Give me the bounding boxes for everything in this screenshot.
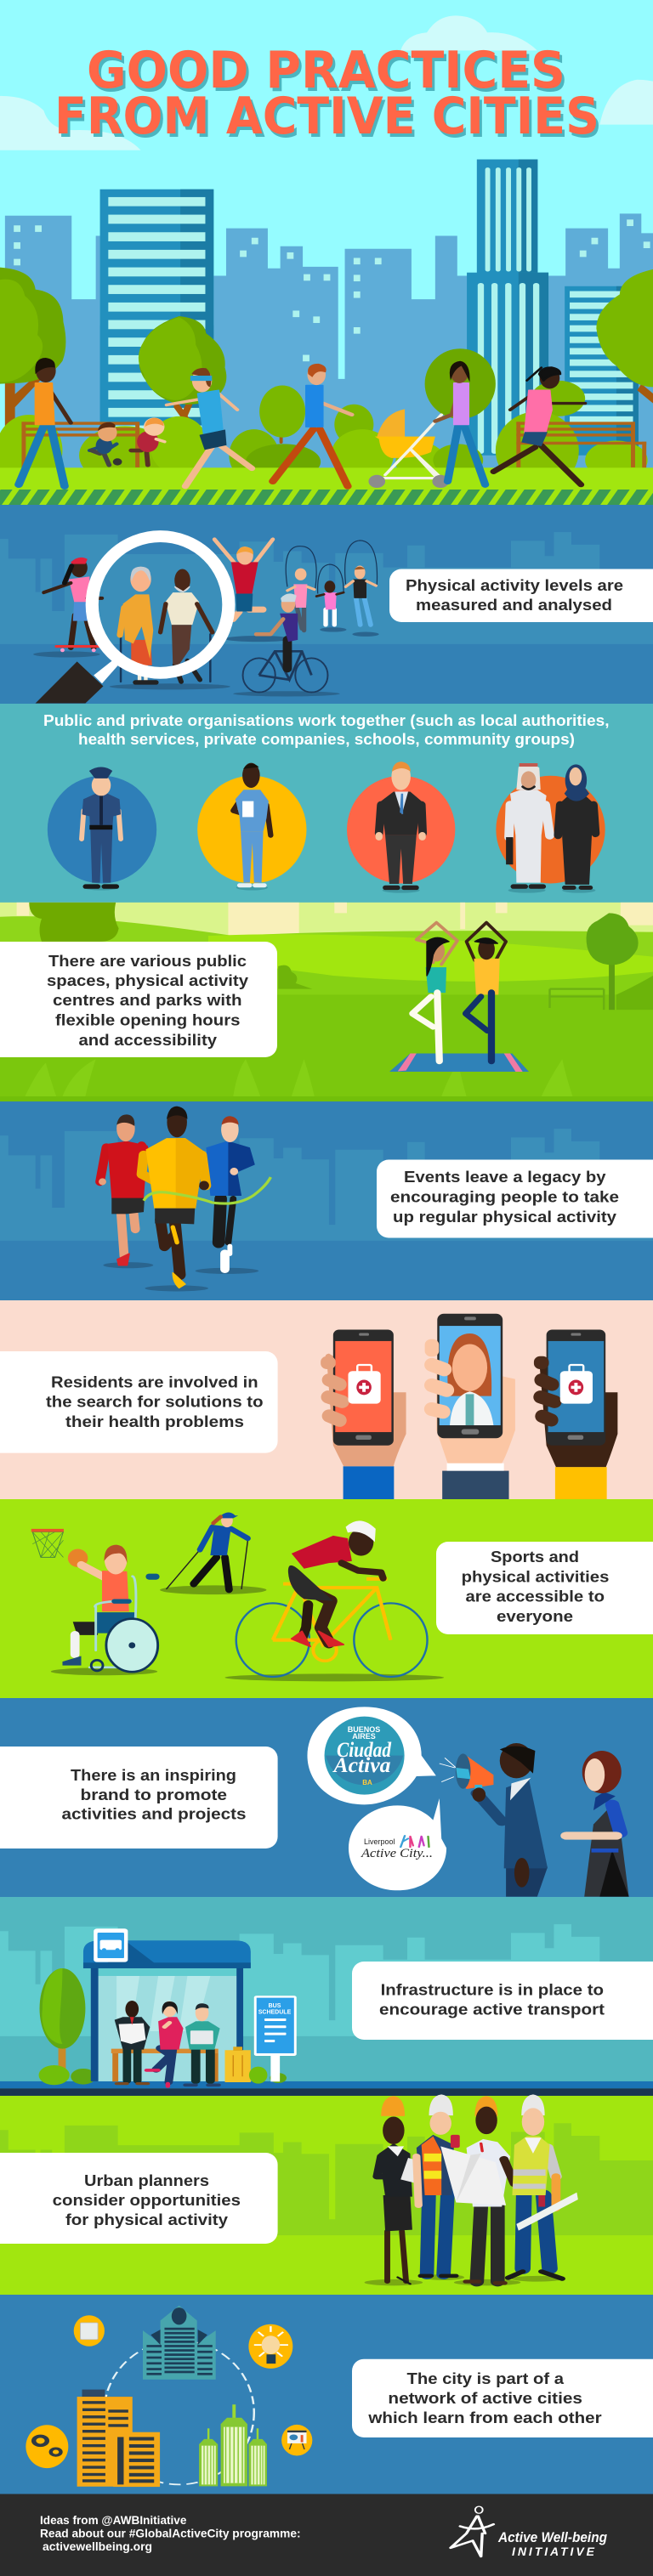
text box: events: encouraging people to take (390, 1188, 619, 1205)
panel: activity measured (0, 505, 653, 704)
tree and bench (550, 913, 653, 1010)
shadows (365, 2274, 563, 2285)
text box: events: Events leave a legacy by (404, 1168, 606, 1186)
text box: network: network of active cities (388, 2389, 582, 2407)
text box: infrastructure (352, 1962, 653, 2040)
nurse (233, 763, 270, 886)
skateboarder (43, 558, 102, 652)
cyclist (243, 593, 327, 693)
green towers (199, 2404, 267, 2486)
background buildings (5, 213, 653, 468)
panel: hero city scene (0, 0, 653, 505)
network illustration (26, 2306, 312, 2487)
sky and buildings (0, 903, 653, 952)
icon: presentation board (281, 2425, 312, 2456)
bench (111, 2049, 219, 2081)
heading text (43, 711, 609, 748)
children with ball (89, 417, 164, 466)
text box: sports: physical activities (462, 1567, 609, 1585)
Liverpool logo text: Active City... (361, 1847, 433, 1860)
striped building right (565, 286, 639, 456)
park scene (0, 903, 653, 1096)
panel: organisations work together (0, 704, 653, 903)
panel: events legacy (0, 1101, 653, 1300)
bush (29, 903, 119, 942)
schedule text: SCHEDULE (258, 2009, 292, 2016)
badge text: AIRES (352, 1732, 376, 1741)
orange buildings (77, 2390, 160, 2487)
text box: brand: activities and projects (61, 1805, 247, 1823)
panel: public spaces (0, 903, 653, 1101)
logo text: Active Well-being (497, 2529, 608, 2545)
text box: public spaces: centres and parks with (53, 991, 241, 1009)
credits text: Read about our #GlobalActiveCity programme: (40, 2526, 301, 2539)
shelter (83, 1940, 251, 2081)
badge (325, 1717, 405, 1795)
bus icon sign (94, 1928, 128, 1962)
text box: events (377, 1159, 653, 1237)
text box: planners: consider opportunities (53, 2191, 241, 2209)
cheering woman (214, 540, 273, 619)
panel: sports accessible (0, 1499, 653, 1698)
text box: residents (0, 1351, 278, 1453)
text box: public spaces: and accessibility (78, 1031, 218, 1049)
skipping family (286, 541, 378, 631)
text box: sports: Sports and (491, 1548, 579, 1565)
text box: public spaces (0, 942, 277, 1057)
woman walking (19, 358, 71, 486)
magnifying glass (36, 536, 229, 703)
text box: measured: Physical activity levels are (406, 576, 623, 594)
measuring illustration (33, 536, 379, 703)
trees (0, 268, 653, 468)
credits text (40, 2513, 301, 2553)
hand 2 doctor phone (422, 1314, 515, 1499)
skyline and ground (0, 1924, 653, 2082)
clouds (0, 15, 653, 150)
inclusive sports illustration (31, 1512, 444, 1681)
text box: sports (436, 1542, 653, 1634)
Liverpool logo text (361, 1837, 433, 1860)
text box: residents: their health problems (65, 1413, 244, 1430)
distant shrubs (278, 965, 312, 989)
shadows (83, 885, 595, 893)
hand 1 phone (319, 1330, 406, 1499)
panel: residents and health (0, 1300, 653, 1499)
shadows (33, 627, 379, 696)
text box: network: which learn from each other (367, 2409, 602, 2426)
title: GOOD PRACTICES (87, 41, 565, 100)
title (54, 41, 602, 150)
striped tower left (100, 190, 213, 437)
text box: planners: Urban planners (84, 2171, 209, 2189)
Liverpool logo text: Liverpool (364, 1837, 395, 1846)
megaphone (440, 1753, 493, 1795)
police officer (82, 767, 121, 886)
text box: infrastructure: Infrastructure is in place to (381, 1981, 604, 1999)
text box: sports: everyone (497, 1607, 573, 1625)
man walking (273, 364, 352, 486)
title: FROM ACTIVE CITIES (57, 90, 602, 150)
man with laptop (185, 2003, 220, 2085)
man with newspaper (115, 2001, 150, 2084)
text box: public spaces: flexible opening hours (55, 1011, 240, 1028)
text box: measured: measured and analysed (416, 596, 612, 614)
woman listening (566, 1751, 629, 1897)
ground (0, 467, 653, 490)
logo text: INITIATIVE (512, 2545, 595, 2558)
basketball hoop (31, 1529, 64, 1557)
heading text: health services, private companies, schools, community groups) (78, 730, 575, 748)
text box: planners (0, 2153, 278, 2244)
hand 3 phone (531, 1330, 617, 1499)
text box: planners: for physical activity (65, 2211, 229, 2228)
wheelchair player (62, 1545, 160, 1672)
logo figure (451, 2506, 493, 2556)
teal tower (143, 2306, 216, 2380)
speech bubble 1 (307, 1707, 436, 1804)
schedule post (254, 1996, 297, 2081)
skyline (0, 2123, 653, 2235)
runner in red (99, 1114, 154, 1265)
three hands with phones (319, 1314, 617, 1499)
circles (48, 776, 605, 884)
businessman (379, 761, 423, 887)
dashed ring (104, 2341, 254, 2484)
badge text: BA (362, 1779, 372, 1786)
icon: tablet (74, 2315, 105, 2347)
med kit (560, 1365, 593, 1404)
schedule text (258, 2003, 292, 2016)
icon: gears (26, 2425, 68, 2468)
shadows (51, 1585, 444, 1681)
tall tower right (467, 160, 548, 456)
badge text (332, 1725, 391, 1786)
man in thobe and woman in abaya (506, 763, 595, 887)
striped path (0, 490, 653, 505)
text box: brand (0, 1747, 278, 1848)
pram (368, 409, 449, 488)
badge text: Ciudad (337, 1739, 391, 1762)
city skyline and park illustration (0, 15, 653, 490)
yoga woman left (412, 923, 457, 1061)
woman pushing pram (435, 361, 485, 484)
text box: brand: There is an inspiring (71, 1766, 236, 1784)
bus stop illustration (0, 1928, 653, 2096)
runner in blue (206, 1116, 255, 1269)
elderly couple (120, 567, 213, 682)
shadows (103, 1262, 258, 1291)
credits text: Ideas from @AWBInitiative (40, 2513, 187, 2527)
hills (0, 916, 653, 1096)
text box: network (352, 2359, 653, 2437)
panel: inspiring brand (0, 1698, 653, 1897)
title: FROM ACTIVE CITIES (54, 87, 599, 146)
icon: light bulb (248, 2324, 292, 2369)
bin (224, 2047, 287, 2084)
hard hats (381, 2094, 545, 2116)
runner in blue (167, 368, 252, 486)
text box: network: The city is part of a (406, 2369, 565, 2387)
text box: public spaces: There are various public (48, 952, 247, 970)
worker with hi-vis (508, 2108, 578, 2279)
planners team (365, 2094, 578, 2285)
benches (21, 422, 646, 467)
speech bubble 2 (349, 1798, 446, 1890)
speech bubbles and speakers (307, 1707, 629, 1897)
panel: urban planners (0, 2094, 653, 2295)
text box: residents: Residents are involved in (51, 1373, 258, 1390)
finish ribbon (144, 1177, 270, 1203)
schedule text: BUS (269, 2003, 281, 2009)
woman with tablet (377, 2117, 424, 2284)
man with megaphone (472, 1743, 548, 1897)
footer (0, 2494, 653, 2576)
panel: city network (0, 2295, 653, 2494)
badge text: Activa (332, 1754, 391, 1777)
logo text (497, 2529, 608, 2558)
text box: infrastructure: encourage active transport (379, 2001, 605, 2018)
cyclist on yellow bike (236, 1520, 428, 1677)
heading text: Public and private organisations work together (such as local authorities, (43, 711, 609, 729)
panel: active transport (0, 1897, 653, 2096)
tree (39, 1968, 96, 2085)
bushes (0, 411, 648, 490)
badge text: BUENOS (348, 1725, 380, 1734)
title: GOOD PRACTICES (89, 44, 568, 104)
pavement (0, 2081, 653, 2096)
planner with blueprint (440, 2107, 514, 2283)
text box: brand: brand to promote (80, 1786, 227, 1803)
grass blades (25, 1059, 572, 1096)
yoga woman right (466, 923, 506, 1061)
nordic walker (167, 1512, 247, 1589)
runner in pink (493, 367, 585, 484)
Liverpool logo dancers (400, 1836, 429, 1847)
credits text: activewellbeing.org (43, 2539, 152, 2553)
text box: events: up regular physical activity (393, 1208, 617, 1226)
yoga mat (389, 1054, 529, 1072)
text box: sports: are accessible to (466, 1588, 605, 1605)
worker with vest (417, 2112, 460, 2276)
woman with phone (146, 2001, 184, 2086)
text box: residents: the search for solutions to (46, 1393, 264, 1411)
people in circles (48, 761, 605, 893)
text box: measured (389, 569, 653, 622)
med kit (348, 1365, 381, 1404)
runner in yellow (142, 1107, 209, 1288)
runners (99, 1107, 270, 1291)
text box: public spaces: spaces, physical activity (47, 971, 249, 989)
